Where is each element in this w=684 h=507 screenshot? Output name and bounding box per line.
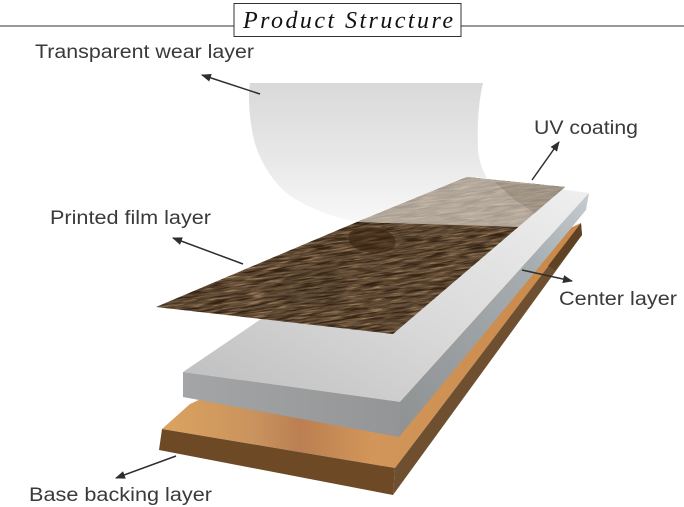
printed film layer [156,177,565,334]
label: center layer: Center layer [559,289,678,310]
label: base backing layer: Base backing layer [29,485,213,506]
title banner [0,4,684,36]
label: UV coating: UV coating [534,118,638,139]
arrow: base backing [116,456,176,478]
arrow: UV coating [532,142,559,180]
label: transparent wear layer: Transparent wear layer [35,42,255,63]
title banner: Product Structure [242,8,453,34]
UV coating overlay [357,177,565,227]
arrow: printed film [173,238,243,264]
label: printed film layer: Printed film layer [50,208,212,229]
center layer [183,177,589,437]
transparent wear layer [249,83,487,222]
arrow: center layer [522,270,572,281]
wood knot [348,226,396,254]
base backing layer [159,223,582,495]
arrow: wear layer [202,75,260,94]
